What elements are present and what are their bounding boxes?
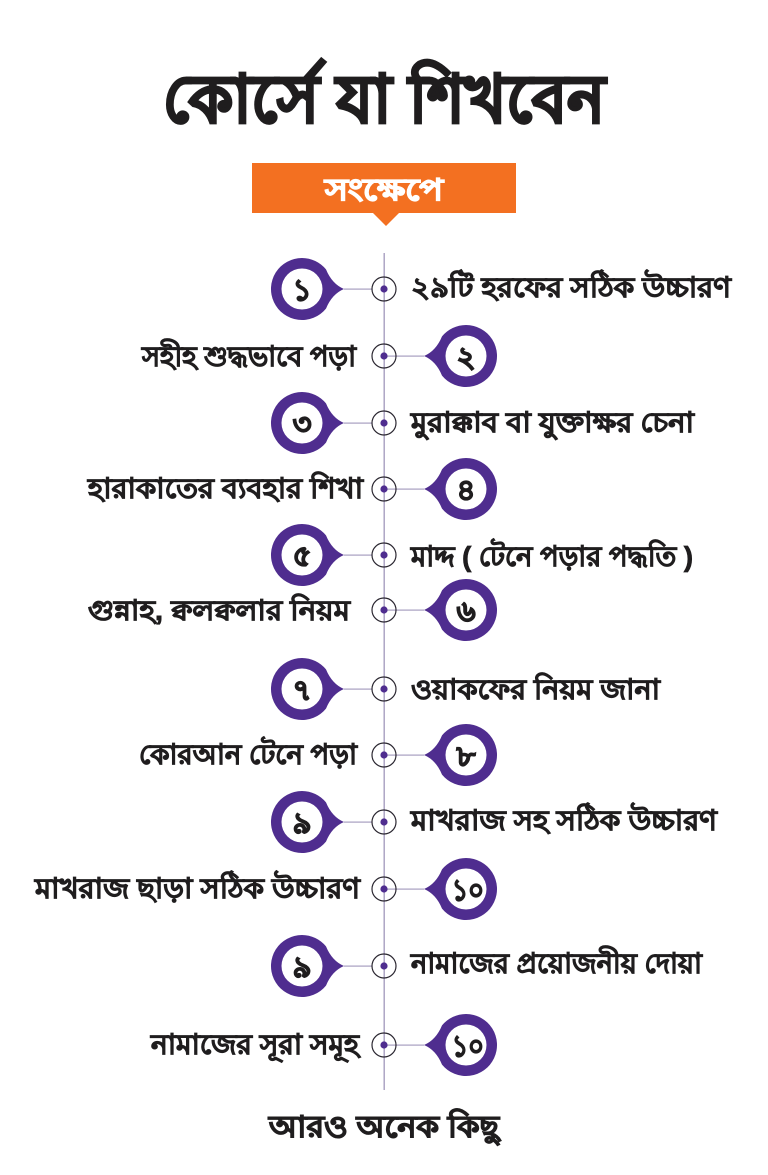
item 8 bbox=[139, 724, 497, 786]
item 5 bbox=[271, 524, 693, 586]
banner: summary bbox=[252, 163, 516, 226]
item 2: সহীহ শুদ্ধভাবে পড়া bbox=[141, 338, 357, 372]
item 12: ১০ bbox=[452, 1031, 484, 1063]
item 2: ২ bbox=[457, 342, 475, 374]
item 10: মাখরাজ ছাড়া সঠিক উচ্চারণ bbox=[34, 870, 361, 904]
item 9: ৯ bbox=[293, 808, 311, 840]
item 4 bbox=[87, 458, 497, 520]
item 6: গুন্নাহ, ক্বলক্বলার নিয়ম bbox=[88, 593, 352, 626]
item 12: নামাজের সূরা সমূহ bbox=[150, 1029, 361, 1063]
item 12 bbox=[150, 1014, 497, 1076]
item 11: ৯ bbox=[293, 952, 311, 984]
item 3 bbox=[271, 392, 695, 454]
item 2 bbox=[141, 325, 497, 387]
item 1: ১ bbox=[293, 275, 311, 307]
item 7 bbox=[271, 658, 661, 720]
item 4: হারাকাতের ব্যবহার শিখা bbox=[87, 471, 364, 504]
footer text: আরও অনেক কিছু bbox=[268, 1108, 502, 1146]
item 9: মাখরাজ সহ সঠিক উচ্চারণ bbox=[410, 802, 718, 836]
timeline axis bbox=[384, 253, 385, 1090]
item 9 bbox=[271, 791, 718, 853]
item 4: ৪ bbox=[457, 475, 475, 507]
title: কোর্সে যা শিখবেন bbox=[163, 58, 608, 136]
item 1 bbox=[271, 258, 732, 320]
item 3: ৩ bbox=[293, 409, 312, 441]
item 7: ৭ bbox=[293, 675, 311, 707]
item 8: কোরআন টেনে পড়া bbox=[139, 736, 358, 770]
item 10 bbox=[34, 858, 497, 920]
item 11 bbox=[271, 935, 703, 997]
item 5: মাদ্দ ( টেনে পড়ার পদ্ধতি ) bbox=[410, 538, 693, 572]
item 7: ওয়াকফের নিয়ম জানা bbox=[411, 672, 661, 705]
item 6 bbox=[88, 579, 497, 641]
item 6: ৬ bbox=[457, 596, 476, 628]
item 8: ৮ bbox=[456, 741, 476, 773]
item 10: ১০ bbox=[452, 875, 484, 907]
item 11: নামাজের প্রয়োজনীয় দোয়া bbox=[410, 945, 703, 979]
item 1: ২৯টি হরফের সঠিক উচ্চারণ bbox=[411, 269, 732, 303]
banner: summary: সংক্ষেপে bbox=[324, 174, 445, 207]
item 3: মুরাক্কাব বা যুক্তাক্ষর চেনা bbox=[410, 407, 695, 440]
item 5: ৫ bbox=[293, 541, 311, 573]
